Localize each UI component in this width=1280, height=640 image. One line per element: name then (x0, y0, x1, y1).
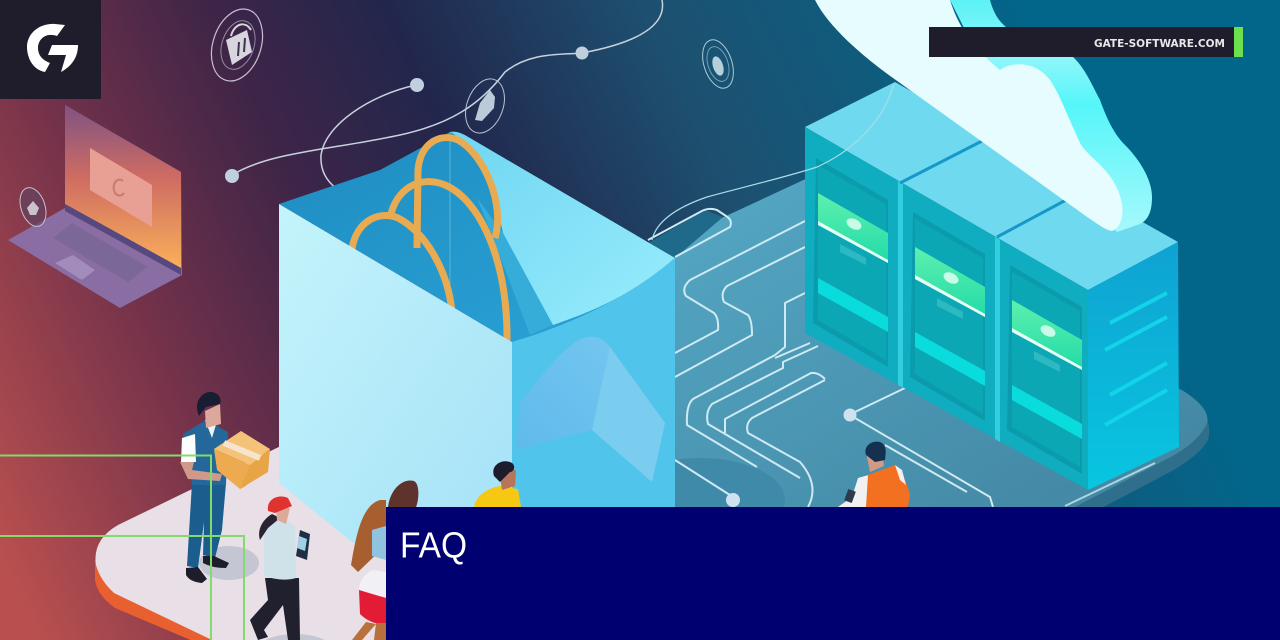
rack panel three (1007, 265, 1082, 474)
person: courier with box (180, 392, 270, 583)
person: woman with long hair (351, 481, 418, 640)
server front face (805, 127, 1088, 490)
bag right face (512, 258, 675, 520)
title panel (386, 507, 1280, 640)
icon: tag badge (459, 74, 511, 138)
bag handle front (352, 216, 452, 312)
icon: small shield badge near laptop (15, 184, 51, 230)
person: man in yellow shirt (474, 461, 521, 507)
bag handle middle (390, 182, 507, 342)
connector lines top (232, 0, 663, 188)
person: woman with phone (250, 497, 310, 640)
icon: G logo (27, 24, 78, 72)
circuit traces (648, 209, 1155, 507)
bag left face (279, 204, 512, 560)
bag flap (450, 132, 675, 325)
person: man in orange vest (838, 442, 910, 507)
bag interior (279, 132, 675, 345)
server racks (805, 82, 1179, 490)
icon: bag badge top left (203, 2, 271, 88)
bag handle back (417, 138, 498, 248)
site banner: GATE-SOFTWARE.COM (1094, 37, 1225, 50)
rack panel two (910, 212, 985, 421)
shopping bag (279, 132, 675, 560)
rack panel one (813, 158, 888, 367)
cloud (815, 0, 1152, 232)
connector line over server (652, 84, 894, 240)
icon: hand badge (697, 36, 739, 92)
server side face (1088, 242, 1179, 490)
connector dots (225, 46, 588, 183)
server top face (805, 82, 1178, 290)
illustration: laptop (8, 105, 182, 308)
logo badge (0, 0, 101, 99)
right platform (615, 177, 1209, 542)
circuit dots (726, 408, 856, 507)
title: FAQ (400, 524, 467, 566)
left platform (95, 444, 395, 640)
green frame lines (0, 456, 244, 640)
site banner (929, 27, 1243, 57)
